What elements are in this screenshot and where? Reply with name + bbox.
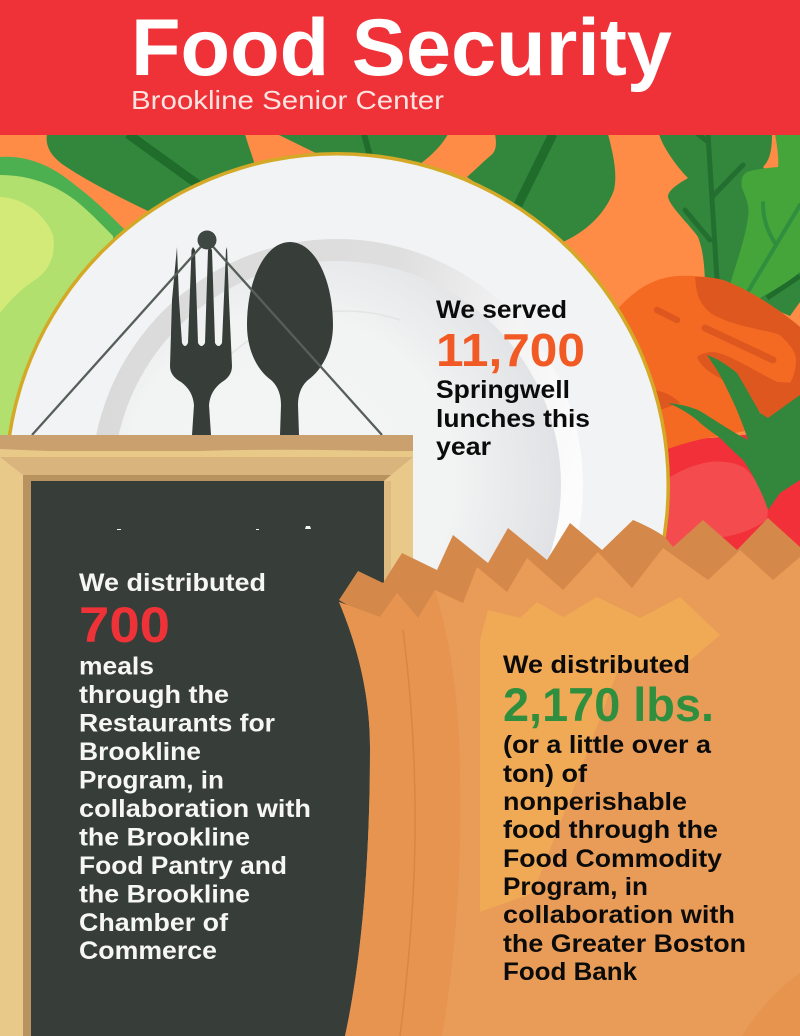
paper bag — [339, 518, 800, 1036]
text block: Food Commodity Program: Food Commodity — [503, 845, 722, 873]
carrot — [615, 276, 800, 452]
text block: Restaurants for Brookline: meals — [79, 652, 154, 680]
title: Food Security — [131, 3, 672, 93]
text block: Restaurants for Brookline: We distributed — [79, 569, 266, 597]
bag fold line — [400, 630, 415, 1036]
leaf: beet greens dark — [659, 134, 800, 316]
plate ring — [91, 239, 583, 731]
number: 700: 700 — [79, 597, 170, 653]
chalkboard surface — [31, 481, 384, 1036]
illustration: leaves, cabbage and vegetables — [0, 134, 800, 570]
text block: Restaurants for Brookline: Chamber of — [79, 909, 229, 937]
text block: Food Commodity Program: collaboration with — [503, 901, 735, 929]
text block: Springwell lunches: lunches this — [436, 405, 590, 433]
text block: Food Commodity Program: food through the — [503, 816, 718, 844]
text block: Food Commodity Program: the Greater Boston — [503, 930, 746, 958]
chalk marks — [117, 526, 311, 530]
text block: Springwell lunches — [436, 296, 590, 461]
plate — [4, 152, 670, 818]
leaf: top right of plate — [467, 134, 615, 242]
text block: Food Commodity Program: We distributed — [503, 651, 690, 679]
bag highlight panel — [480, 597, 720, 912]
text block: Restaurants for Brookline: Restaurants for — [79, 710, 275, 738]
bag back zigzag — [339, 518, 800, 680]
text block: Food Commodity Program: (or a little over a — [503, 731, 712, 759]
leaf: beet greens light — [730, 134, 800, 320]
text block: Food Commodity Program: Food Bank — [503, 958, 637, 986]
bag body — [339, 548, 800, 1036]
text block: Springwell lunches: year — [436, 433, 491, 461]
bag left panel shading — [339, 590, 460, 1036]
text block: Restaurants for Brookline: the Brookline — [79, 824, 250, 852]
tomato — [660, 430, 800, 570]
text block: Restaurants for Brookline: through the — [79, 681, 229, 709]
icon: spoon — [247, 242, 333, 435]
subtitle: Brookline Senior Center — [131, 85, 444, 115]
leaf: top left — [47, 134, 255, 212]
text block: Springwell lunches: We served — [436, 296, 567, 324]
text block: Food Commodity Program: nonperishable — [503, 788, 687, 816]
text block: Food Commodity Program — [503, 651, 746, 986]
cabbage — [0, 157, 130, 440]
header band — [0, 0, 800, 135]
number: 11,700: 11,700 — [436, 324, 585, 376]
leaf: top centre — [277, 134, 448, 164]
leaf: beet stem — [668, 355, 800, 510]
number: 2,170 lbs.: 2,170 lbs. — [503, 678, 714, 731]
chalkboard sign — [0, 435, 413, 1036]
icon: nail — [198, 230, 216, 250]
text block: Springwell lunches: Springwell — [436, 376, 570, 404]
text block: Restaurants for Brookline: collaboration with — [79, 795, 311, 823]
icon: fork — [170, 247, 232, 435]
text block: Restaurants for Brookline: the Brookline — [79, 880, 250, 908]
text block: Restaurants for Brookline — [79, 569, 311, 965]
text block: Food Commodity Program: ton) of — [503, 760, 588, 788]
sign hanging strings — [32, 240, 382, 435]
wooden frame — [0, 435, 413, 1036]
text block: Food Commodity Program: Program, in — [503, 873, 648, 901]
text block: Restaurants for Brookline: Program, in — [79, 766, 224, 794]
text block: Restaurants for Brookline: Brookline — [79, 738, 201, 766]
bag corner shading — [742, 973, 800, 1036]
text block: Restaurants for Brookline: Food Pantry and — [79, 852, 287, 880]
text block: Restaurants for Brookline: Commerce — [79, 937, 217, 965]
